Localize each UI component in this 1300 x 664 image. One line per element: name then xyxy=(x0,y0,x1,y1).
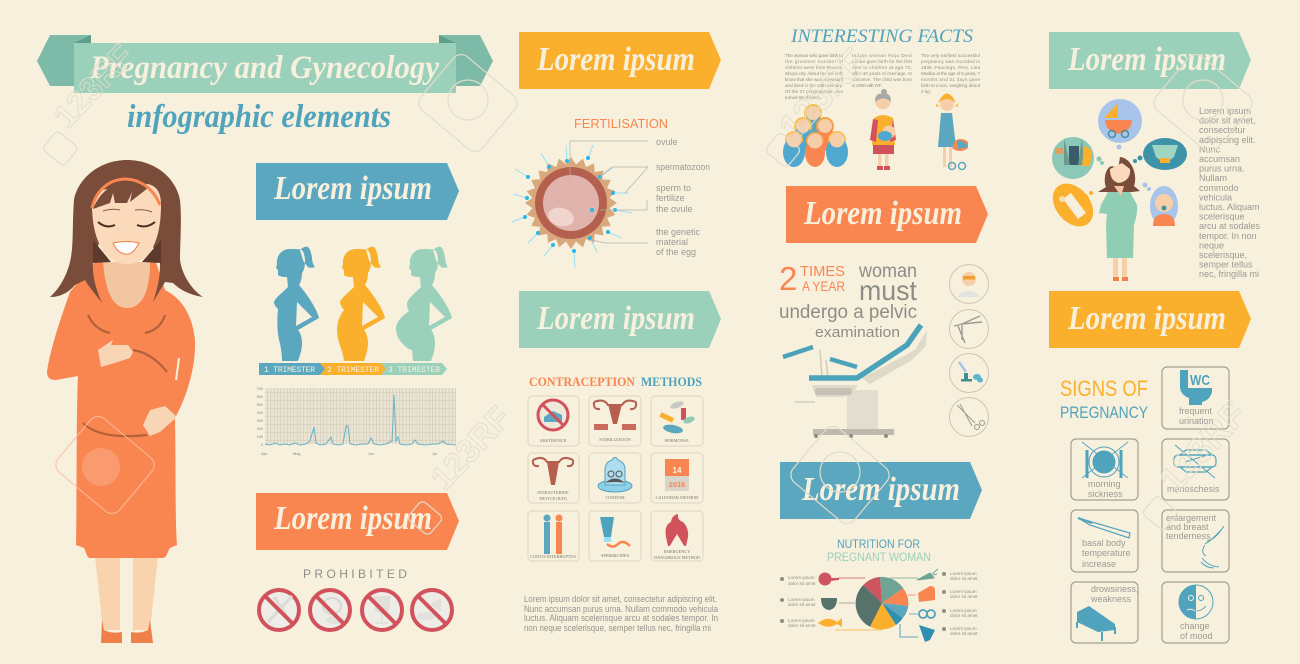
orange heading arrow: Lorem ipsum xyxy=(273,500,432,537)
mint heading arrow xyxy=(519,291,721,348)
tile: calendar method: CALENDAR METHOD xyxy=(656,495,698,500)
tile: emergency methods: DANGEROUS METHOD xyxy=(654,555,700,560)
yellow heading arrow: Lorem ipsum xyxy=(536,41,695,78)
bubble: nappy xyxy=(1133,138,1187,170)
fact column 1 xyxy=(785,53,844,100)
title ribbon: Pregnancy and Gynecology xyxy=(89,50,439,86)
right column paragraph: scelerisque xyxy=(1199,212,1245,222)
lorem paragraph: Nunc accumsan purus urna. Nullam commodo vehicula xyxy=(524,604,718,614)
pregnant woman illustration xyxy=(47,160,203,643)
nutrition legend right: Lorem ipsum xyxy=(950,608,977,613)
fact column 1: The woman who gave birth to xyxy=(785,53,843,58)
tile: spermicides xyxy=(589,511,641,561)
right column paragraph: consectetur xyxy=(1199,125,1246,135)
thought bubbles xyxy=(1045,99,1187,234)
stock watermarks xyxy=(42,37,1256,536)
line chart: 400 xyxy=(257,411,263,415)
tile: change of mood: of mood xyxy=(1180,631,1213,641)
line chart: May xyxy=(293,451,301,456)
fact column 2: Indian woman Rajo Devi xyxy=(852,53,912,58)
right column paragraph: purus urna. xyxy=(1199,164,1245,174)
fact column 2 xyxy=(852,53,913,88)
contraception methods grid xyxy=(528,396,703,561)
nutrition legend right: dolor sit amet xyxy=(950,631,978,636)
fact column 1: turned 69 children. xyxy=(785,95,821,100)
tile: calendar method xyxy=(651,453,703,503)
tile: drowsiness, weakness: weakness xyxy=(1090,594,1132,604)
nutrition legend left: dolor sit amet xyxy=(788,623,816,628)
pelvic examination statement: must xyxy=(859,275,917,306)
pelvic examination statement: 2 xyxy=(779,260,797,297)
icon: no pills xyxy=(412,590,452,630)
prohibited icons xyxy=(259,590,452,630)
bubble: nursery room xyxy=(1052,137,1104,179)
signs of pregnancy heading xyxy=(1060,376,1148,422)
tile: hormonal: HORMONAL xyxy=(665,438,690,443)
exam tool icons xyxy=(950,264,988,436)
nutrition legend right: Lorem ipsum xyxy=(950,571,977,576)
illustration: group of babies xyxy=(783,104,848,167)
right column paragraph: dolor sit amet, xyxy=(1199,116,1256,126)
icon: meat xyxy=(818,572,839,586)
tile: enlargement and breast tenderness: enlargement xyxy=(1166,513,1217,523)
silhouette: second trimester xyxy=(337,247,385,361)
fact column 2: Lohan gave birth for the first xyxy=(852,59,913,64)
blue heading arrow: Lorem ipsum xyxy=(273,170,432,207)
fertilisation labels: the genetic xyxy=(656,227,701,237)
contraception heading xyxy=(529,374,702,389)
fertilisation labels: spermatozoon xyxy=(656,162,710,172)
line chart: 200 xyxy=(257,427,263,431)
right column paragraph: tempor. In non xyxy=(1199,231,1257,241)
tile: sterilization xyxy=(589,396,641,446)
icon: speculum xyxy=(950,310,988,348)
fact column 3: months and 21 days gave xyxy=(921,77,980,82)
nutrition legend right: dolor sit amet xyxy=(950,613,978,618)
icon: carrot xyxy=(917,569,938,580)
fact column 3: Medina at the age of 5 years, 7 xyxy=(921,71,980,76)
right column paragraph: Nullam xyxy=(1199,173,1227,183)
icon: no alcohol xyxy=(362,590,402,630)
right column paragraph: luctus. Aliquam xyxy=(1199,202,1260,212)
line chart xyxy=(257,387,456,456)
tile: menoschesis: menoschesis xyxy=(1167,484,1220,494)
fertilisation diagram xyxy=(512,141,648,268)
trimester silhouettes xyxy=(274,247,452,361)
signs of pregnancy heading: PREGNANCY xyxy=(1060,403,1148,422)
right column paragraph: scelerisque, xyxy=(1199,250,1247,260)
tile: morning sickness xyxy=(1071,439,1138,500)
nutrition legend right xyxy=(942,571,978,636)
fact column 3: 1939. Paucargo, Peru. Lina xyxy=(921,65,980,70)
blue heading arrow xyxy=(256,163,459,220)
tile: frequent urination: urination xyxy=(1179,416,1214,426)
nutrition legend left: dolor sit amet xyxy=(788,581,816,586)
pie chart xyxy=(835,577,918,637)
illustration: girl with pram xyxy=(935,94,968,170)
illustration: grandmother with baby xyxy=(870,89,896,170)
icon: pretzel xyxy=(919,610,935,618)
blue heading arrow: Lorem ipsum xyxy=(801,471,960,508)
nutrition legend left: dolor sit amet xyxy=(788,602,816,607)
lorem paragraph: luctus. Aliquam scelerisque arcu at sodales tempor. In xyxy=(524,613,718,623)
silhouette: first trimester xyxy=(274,247,319,361)
nutrition legend left xyxy=(780,575,816,628)
line chart: 700 xyxy=(257,387,263,391)
tile: intrauterine device: INTRAUTERINE xyxy=(537,490,569,495)
contraception heading: CONTRACEPTION xyxy=(529,374,636,389)
bubble: baby bottle xyxy=(1045,176,1101,234)
tile: basal body temperature increase: increase xyxy=(1082,559,1116,569)
tile: coitus interruptus xyxy=(528,511,579,561)
trimester labels xyxy=(259,363,447,375)
fact column 2: conceive. The child was born xyxy=(852,77,912,82)
fact column 1: children were from Russia, xyxy=(785,65,843,70)
mint heading arrow xyxy=(1049,32,1251,89)
bubble: crying baby xyxy=(1142,182,1178,226)
fertilisation labels xyxy=(656,137,710,257)
signs of pregnancy heading: SIGNS OF xyxy=(1060,376,1148,401)
fact column 3 xyxy=(921,53,981,94)
tile: morning sickness: sickness xyxy=(1088,489,1123,499)
trimester labels: 3 TRIMESTER xyxy=(388,366,440,375)
blue heading arrow xyxy=(780,462,982,519)
pelvic examination statement: undergo a pelvic xyxy=(779,302,917,323)
orange heading arrow xyxy=(786,186,988,243)
tile: morning sickness: morning xyxy=(1088,479,1121,489)
icon: microscope xyxy=(950,354,988,392)
icon: no medicine xyxy=(310,590,350,630)
icon: bowl xyxy=(821,598,837,610)
fact column 2: in 2008 with IVF. xyxy=(852,83,882,88)
tile: frequent urination: WC xyxy=(1190,372,1210,389)
nutrition legend left: Lorem ipsum xyxy=(788,597,815,602)
tile: intrauterine device xyxy=(528,453,579,503)
fact column 1: the greatest number of xyxy=(785,59,844,64)
yellow heading arrow xyxy=(1049,291,1251,348)
tile: drowsiness, weakness: drowsiness, xyxy=(1091,584,1139,594)
fertilisation labels: sperm to xyxy=(656,183,691,193)
tile: basal body temperature increase xyxy=(1071,510,1138,572)
right column paragraph xyxy=(1199,106,1261,279)
fact column 1: and lived in the 18th century. xyxy=(785,83,843,88)
pelvic examination statement: examination xyxy=(815,324,900,341)
tile: sterilization: STERILIZATION xyxy=(599,437,631,442)
line chart: 500 xyxy=(257,403,263,407)
mint heading arrow: Lorem ipsum xyxy=(536,300,695,337)
trimester labels: 2 TRIMESTER xyxy=(327,366,379,375)
orange heading arrow xyxy=(256,493,459,550)
bubble: pram xyxy=(1098,99,1142,150)
nutrition legend right: dolor sit amet xyxy=(950,594,978,599)
fertilisation labels: the ovule xyxy=(656,204,693,214)
line chart: 0 xyxy=(261,443,263,447)
contraception heading: METHODS xyxy=(641,374,702,389)
tile: drowsiness, weakness xyxy=(1071,582,1139,643)
right column paragraph: commodo xyxy=(1199,183,1239,193)
tile: change of mood xyxy=(1162,582,1229,643)
gynecological chair xyxy=(783,325,927,438)
right column paragraph: Lorem ipsum xyxy=(1199,106,1251,116)
stock watermarks: 123RF xyxy=(423,399,518,497)
line chart: 100 xyxy=(257,435,263,439)
nutrition icons xyxy=(818,569,938,642)
tile: abstinence xyxy=(528,396,579,446)
tile: frequent urination: frequent xyxy=(1179,406,1213,416)
stock watermarks: 123RF xyxy=(46,37,141,135)
icon: no cigarette xyxy=(259,590,299,630)
yellow heading arrow xyxy=(519,32,721,89)
woman thinking illustration xyxy=(1098,157,1140,281)
fact column 3: The very earliest successful xyxy=(921,53,980,58)
tile: basal body temperature increase: temperature xyxy=(1082,548,1131,558)
right column paragraph: neque xyxy=(1199,240,1224,250)
trimester labels: 1 TRIMESTER xyxy=(264,366,315,375)
pelvic examination statement: woman xyxy=(858,261,917,282)
nutrition heading: NUTRITION FOR xyxy=(837,539,920,551)
lorem paragraph: non neque scelerisque, semper tellus nec, fringilla mi xyxy=(524,623,711,633)
line chart: Jun xyxy=(368,451,374,456)
stock watermarks: 123RF xyxy=(1151,393,1255,500)
nutrition legend left: Lorem ipsum xyxy=(788,618,815,623)
tile: frequent urination xyxy=(1162,367,1229,429)
line chart: 600 xyxy=(257,395,263,399)
right column paragraph: accumsan xyxy=(1199,154,1240,164)
fertilisation heading: FERTILISATION xyxy=(574,117,668,131)
tile: menoschesis xyxy=(1162,439,1229,500)
pregnancy sign tiles xyxy=(1071,367,1229,643)
fact column 3: pregnancy was recorded in xyxy=(921,59,980,64)
nutrition heading xyxy=(827,539,931,564)
title ribbon xyxy=(37,35,493,93)
tile: condom: CONDOM xyxy=(605,495,625,500)
right column paragraph: semper tellus xyxy=(1199,260,1253,270)
tile: condom xyxy=(589,453,641,503)
silhouette: third trimester xyxy=(396,247,452,361)
right column paragraph: vehicula xyxy=(1199,192,1232,202)
tile: calendar method: 2016 xyxy=(669,480,685,489)
fertilisation labels: fertilize xyxy=(656,193,685,203)
stock watermarks: 123RF xyxy=(771,40,875,147)
icon: fish xyxy=(818,618,842,627)
line chart: Jul xyxy=(432,451,437,456)
fact column 1: know that she was a peasant xyxy=(785,77,844,82)
tile: abstinence: ABSTINENCE xyxy=(540,438,567,443)
fertilisation labels: ovule xyxy=(656,137,678,147)
fact column 3: 2 kg. xyxy=(921,89,931,94)
orange heading arrow: Lorem ipsum xyxy=(803,195,962,232)
tile: emergency methods xyxy=(651,511,703,561)
lorem paragraph xyxy=(524,594,718,633)
nutrition legend left: Lorem ipsum xyxy=(788,575,815,580)
tile: enlargement and breast tenderness xyxy=(1162,510,1229,572)
fact column 3: birth to a son, weighing about xyxy=(921,83,981,88)
right column paragraph: adipiscing elit. xyxy=(1199,135,1256,145)
pelvic examination statement: TIMES xyxy=(800,263,845,280)
line chart: Apr xyxy=(261,451,268,456)
right column paragraph: Nunc xyxy=(1199,144,1221,154)
icon: grapes xyxy=(919,625,935,642)
pelvic examination statement xyxy=(779,260,917,341)
nutrition legend right: Lorem ipsum xyxy=(950,626,977,631)
subtitle: infographic elements xyxy=(127,99,391,135)
yellow heading arrow: Lorem ipsum xyxy=(1067,300,1226,337)
icon: cheese xyxy=(918,586,935,602)
fact column 2: after 40 years of marriage, to xyxy=(852,71,912,76)
tile: enlargement and breast tenderness: tenderness xyxy=(1166,531,1211,541)
nutrition legend right: Lorem ipsum xyxy=(950,589,977,594)
tile: intrauterine device: DEVICE (IUD) xyxy=(539,496,567,501)
prohibited heading: PROHIBITED xyxy=(303,567,410,581)
tile: hormonal xyxy=(651,396,703,446)
fact column 1: Shuya city. About her we only xyxy=(785,71,844,76)
nutrition heading: PREGNANT WOMAN xyxy=(827,552,931,564)
right column paragraph: arcu at sodales xyxy=(1199,221,1261,231)
tile: basal body temperature increase: basal body xyxy=(1082,538,1126,548)
line chart: 300 xyxy=(257,419,263,423)
tile: coitus interruptus: COITUS INTERRUPTUS xyxy=(530,554,576,559)
icon: scissors xyxy=(950,398,988,436)
tile: calendar method: 14 xyxy=(673,466,682,475)
right column paragraph: nec, fringilla mi xyxy=(1199,269,1259,279)
tile: enlargement and breast tenderness: and breast xyxy=(1166,522,1209,532)
nutrition legend right: dolor sit amet xyxy=(950,576,978,581)
tile: spermicides: SPERMICIDES xyxy=(601,553,630,558)
fertilisation labels: of the egg xyxy=(656,247,696,257)
fertilisation labels: material xyxy=(656,237,688,247)
icon: doctor xyxy=(950,264,988,304)
pelvic examination statement: A YEAR xyxy=(802,279,845,294)
fact column 1: Of the 27 pregnancies, she xyxy=(785,89,843,94)
mint heading arrow: Lorem ipsum xyxy=(1067,41,1226,78)
tile: change of mood: change xyxy=(1180,621,1210,631)
interesting facts heading: INTERESTING FACTS xyxy=(790,26,974,47)
tile: emergency methods: EMERGENCY xyxy=(664,549,690,554)
fact column 2: time to children at age 70, xyxy=(852,65,912,70)
lorem paragraph: Lorem ipsum dolor sit amet, consectetur adipiscing elit. xyxy=(524,594,717,604)
